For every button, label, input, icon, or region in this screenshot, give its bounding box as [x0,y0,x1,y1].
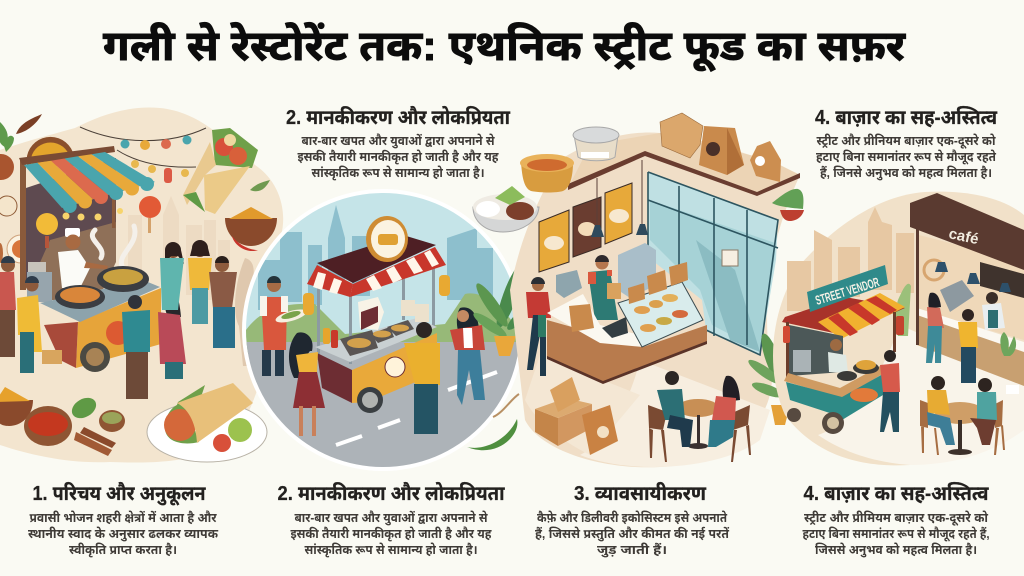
top boxes and bags [520,113,781,192]
beige skyline [787,207,914,315]
customer teal back [122,295,150,399]
body: step 2: सांस्कृतिक रूप से सामान्य हो जाता है। [304,542,478,558]
cart [40,266,161,372]
hanging plant [772,189,804,221]
onlookers [160,240,237,348]
left floating food plates [0,114,74,263]
roof [317,235,436,283]
ledge [568,133,800,196]
body: step 4 top: हटाए बिना समानांतर रूप से मौजूद रहते [816,149,996,165]
panel: food court cafe scene [473,113,804,467]
lanterns [36,196,161,248]
counter [547,294,707,384]
potted plant [471,262,534,356]
pendant lamps [591,160,648,237]
vendor stall: STREET VENDOR [813,274,881,308]
bags floor [535,377,618,455]
plant cafe side [746,331,794,425]
noodle bowl [473,186,539,232]
window [648,172,778,355]
text: step 3 bottom [535,481,730,559]
body: step 3: हैं, जिससे प्रस्तुति और कीमत की नई परतें [535,526,730,543]
body: step 2 top: बार-बार खपत और युवाओं द्वारा अपनाने से [302,133,495,150]
display case [618,282,703,347]
title: गली से रेस्टोरेंट तक: एथनिक स्ट्रीट फूड का सफ़र [103,22,907,72]
body: step 4: स्ट्रीट और प्रीमियम बाज़ार एक-दूसरे को [804,510,988,526]
customer yellow [404,322,440,434]
plants cafe [1000,332,1016,356]
body: step 1 [28,510,219,558]
lanterns on cart [303,275,450,315]
menu boards [539,183,632,272]
backdrop skyline [128,196,230,300]
heading: step 4: 4. बाज़ार का सह-अस्तित्व [804,481,989,505]
body: step 4 top: स्ट्रीट और प्रीनियम बाज़ार एक-दूसरे को [816,133,996,149]
cafe shopfront [910,193,1024,386]
heading: step 2 top: 2. मानकीकरण और लोकप्रियता [286,105,511,129]
cafe staff and customers [926,292,1005,383]
body: step 4: हटाए बिना समानांतर रूप से मौजूद रहते हैं, [802,526,990,542]
string lights [80,127,206,183]
paper bags counter [569,262,688,332]
body: step 4 top: हैं, जिनसे अनुभव को महत्व मिलता है। [820,165,992,182]
chef [58,228,108,288]
herb [250,180,270,191]
body: step 4 top [816,133,996,182]
body: step 3: जुड़ जाती हैं। [597,542,667,559]
server [260,276,308,376]
vendor stall [782,265,905,434]
text: step 2 top [286,105,511,181]
body: step 2: इसकी तैयारी मानकीकृत हो जाती है और यह [290,526,492,542]
diners table [920,376,1005,455]
cafe shopfront: café [947,225,980,248]
stall back [26,158,116,284]
customer pink [158,285,186,379]
awning [24,152,155,213]
cart body [315,262,437,413]
espresso machine [556,270,582,298]
plate with wrap [147,383,267,462]
panel: coexisting market scene [773,192,1024,465]
barista [588,255,621,320]
body: step 4: जिससे अनुभव को महत्व मिलता है। [815,542,977,559]
chili [232,236,258,251]
body: step 2 top [298,133,499,181]
sign [366,216,408,262]
body: step 4 [802,510,990,559]
customer dress [289,332,325,436]
body: step 2 [290,510,492,558]
body: step 1: स्वीकृति प्राप्त करता है। [69,542,177,558]
wrap top [183,128,258,214]
heading: step 4 top: 4. बाज़ार का सह-अस्तित्व [815,105,998,129]
body: step 2 top: सांस्कृतिक रूप से सामान्य हो जाता है। [312,165,484,181]
customer red [526,277,551,376]
bowl turmeric [225,207,277,246]
steam [92,226,135,266]
pepper [467,419,517,450]
panel: standardised cart scene [240,189,534,480]
pot [28,262,46,274]
heading: step 2: 2. मानकीकरण और लोकप्रियता [278,481,506,505]
body: step 2: बार-बार खपत और युवाओं द्वारा अपनाने से [294,510,488,527]
body: step 3: कैफ़े और डिलीवरी इकोसिस्टम इसे अपनाते [537,510,727,525]
body: step 2 top: इसकी तैयारी मानकीकृत हो जाती है और यह [298,149,499,165]
panel: street stall scene [0,107,283,463]
text: step 2 bottom [278,481,506,558]
body: step 1: स्थानीय स्वाद के अनुसार ढलकर व्यापक [28,526,219,543]
heading: step 3: 3. व्यावसायीकरण [574,481,707,505]
text: step 4 top [815,105,998,182]
text: step 4 bottom [802,481,990,559]
pot [1006,385,1019,394]
table couple [648,371,751,462]
customer yellow [17,276,42,373]
heading: step 1: 1. परिचय और अनुकूलन [32,481,206,506]
vendor customer [880,350,900,432]
fridge [618,243,656,298]
awning striped [307,247,446,297]
spices [0,387,125,456]
customer jacket [450,307,485,405]
body: step 1: प्रवासी भोजन शहरी क्षेत्रों में आता है और [30,510,217,525]
pos terminal [602,317,628,338]
text: step 1 bottom [28,481,219,558]
body: step 3 [535,510,730,559]
skyline blue [258,205,493,310]
customer left red [0,256,16,357]
